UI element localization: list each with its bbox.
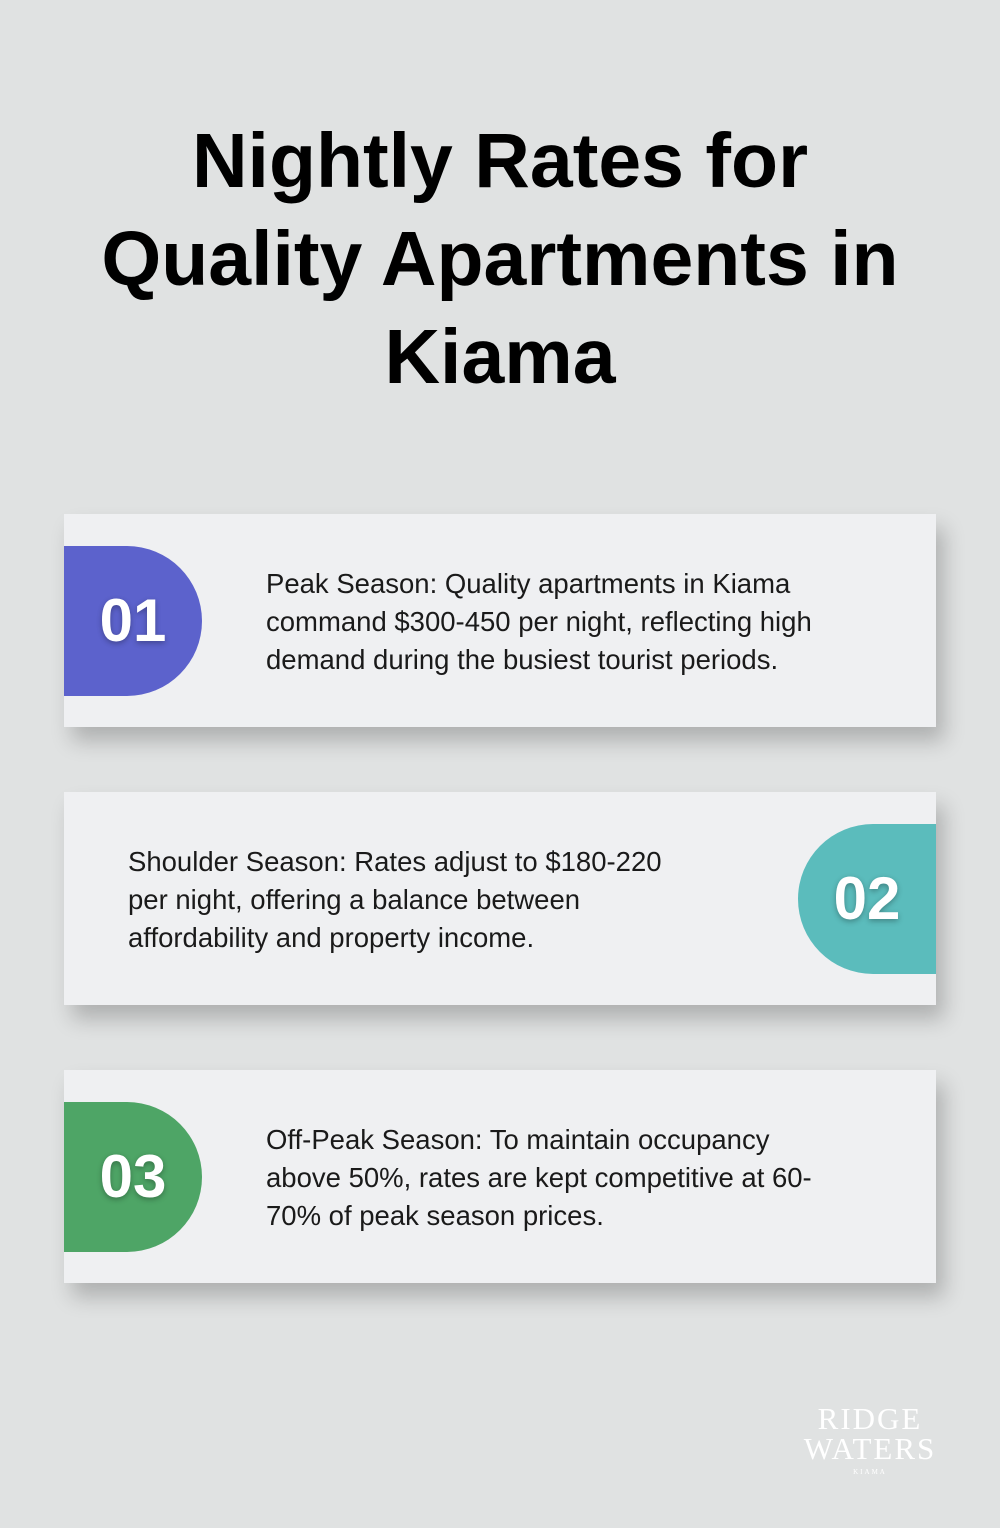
title: Kiama	[384, 314, 616, 400]
logo: KIAMA	[853, 1468, 887, 1476]
badge 03: 03	[100, 1143, 166, 1210]
badge 03	[64, 1102, 202, 1252]
card 2	[64, 792, 936, 1005]
text 2: Shoulder Season: Rates adjust to $180-220	[128, 846, 662, 877]
text 3: above 50%, rates are kept competitive at 60-	[266, 1162, 812, 1193]
text 1: Peak Season: Quality apartments in Kiama	[266, 568, 790, 599]
badge 01: 01	[100, 587, 166, 654]
card 3	[64, 1070, 936, 1283]
text 2: affordability and property income.	[128, 922, 534, 953]
badge 02: 02	[834, 865, 900, 932]
logo	[804, 1401, 936, 1476]
text 1	[266, 568, 812, 675]
badge 02	[798, 824, 936, 974]
badge 01	[64, 546, 202, 696]
logo: RIDGE	[818, 1401, 922, 1436]
text 2	[128, 846, 662, 953]
text 3: 70% of peak season prices.	[266, 1200, 604, 1231]
logo: WATERS	[804, 1431, 936, 1466]
text 3	[266, 1124, 812, 1231]
title: Quality Apartments in	[101, 216, 899, 302]
text 3: Off-Peak Season: To maintain occupancy	[266, 1124, 769, 1155]
text 2: per night, offering a balance between	[128, 884, 580, 915]
text 1: demand during the busiest tourist periods.	[266, 644, 778, 675]
card 1	[64, 514, 936, 727]
title	[101, 118, 899, 400]
text 1: command $300-450 per night, reflecting high	[266, 606, 812, 637]
title: Nightly Rates for	[192, 118, 808, 204]
